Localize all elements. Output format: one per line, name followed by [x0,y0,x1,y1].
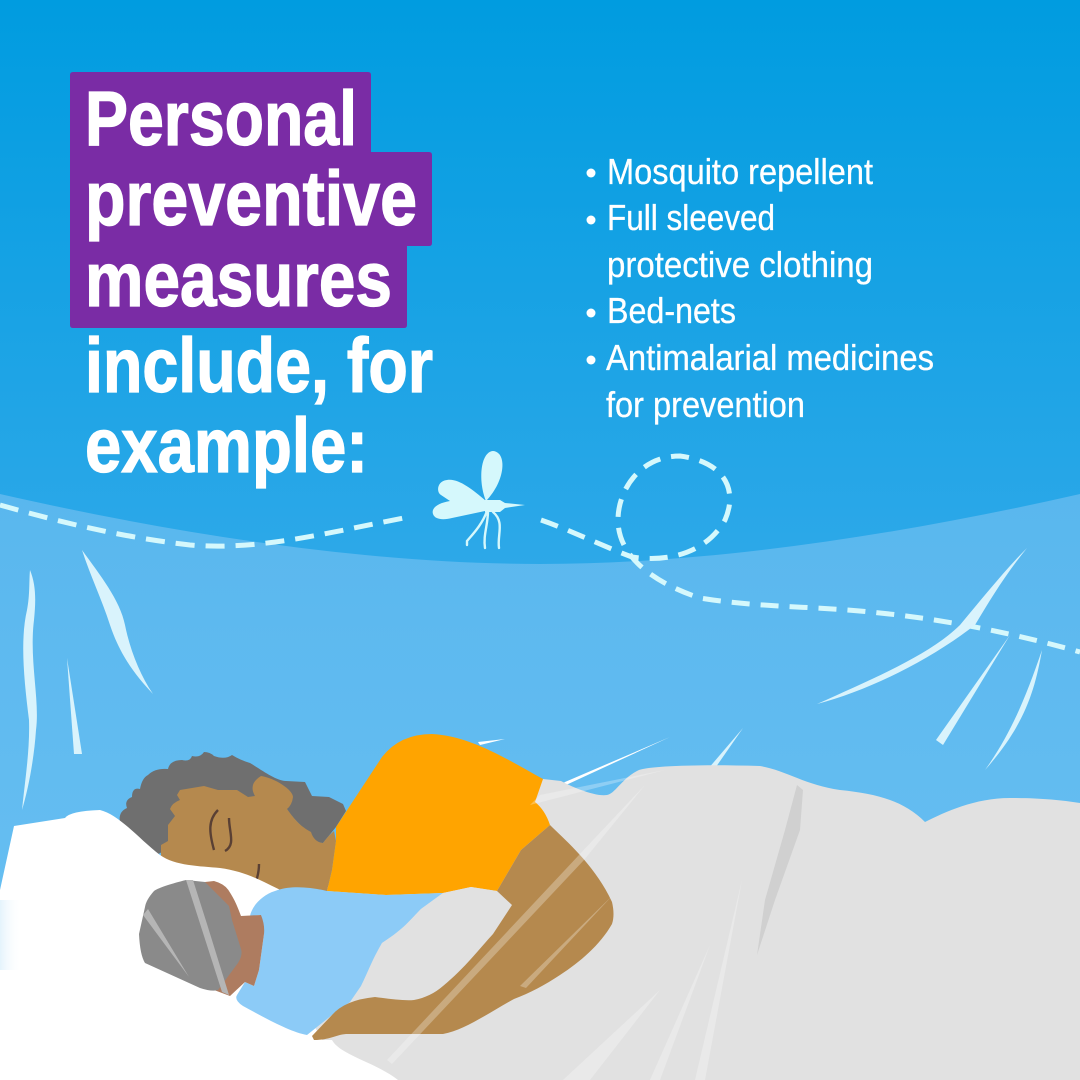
title: include, for [85,323,433,409]
man sleeping [120,734,550,900]
title: example: [85,403,368,489]
title: Personal [85,76,357,162]
blanket [300,765,1080,1080]
title: measures [85,237,392,323]
title: preventive [85,156,417,242]
bullet list: Antimalarial medicines [606,337,934,378]
title highlight boxes [70,72,432,328]
woman shirt [236,887,443,1035]
net creases on sky [22,548,1042,810]
man hair [120,752,346,856]
icon: mosquito [433,451,525,548]
lower background band [0,494,1080,1080]
man eyes and mouth [210,810,259,890]
woman hair [139,880,242,991]
bullet list: Bed-nets [607,290,736,331]
man shirt [327,734,550,895]
man face [161,776,336,900]
bullet list: Full sleeved [607,197,775,238]
bullet list: for prevention [606,384,805,425]
bullet list: protective clothing [607,244,873,285]
title [70,72,433,489]
woman sleeping [139,880,443,1035]
white pillow [0,810,398,1080]
pillow edge fade [0,900,22,970]
background sky [0,0,1080,600]
mosquito flight path [0,456,1080,652]
hair creases [143,880,229,995]
bullet list [586,151,934,425]
net creases over bed [387,770,742,1080]
blanket fold [757,785,803,955]
hugged pillow [357,887,512,1000]
man arm [312,825,614,1040]
woman skin [205,881,264,996]
bullet list: Mosquito repellent [607,151,873,192]
